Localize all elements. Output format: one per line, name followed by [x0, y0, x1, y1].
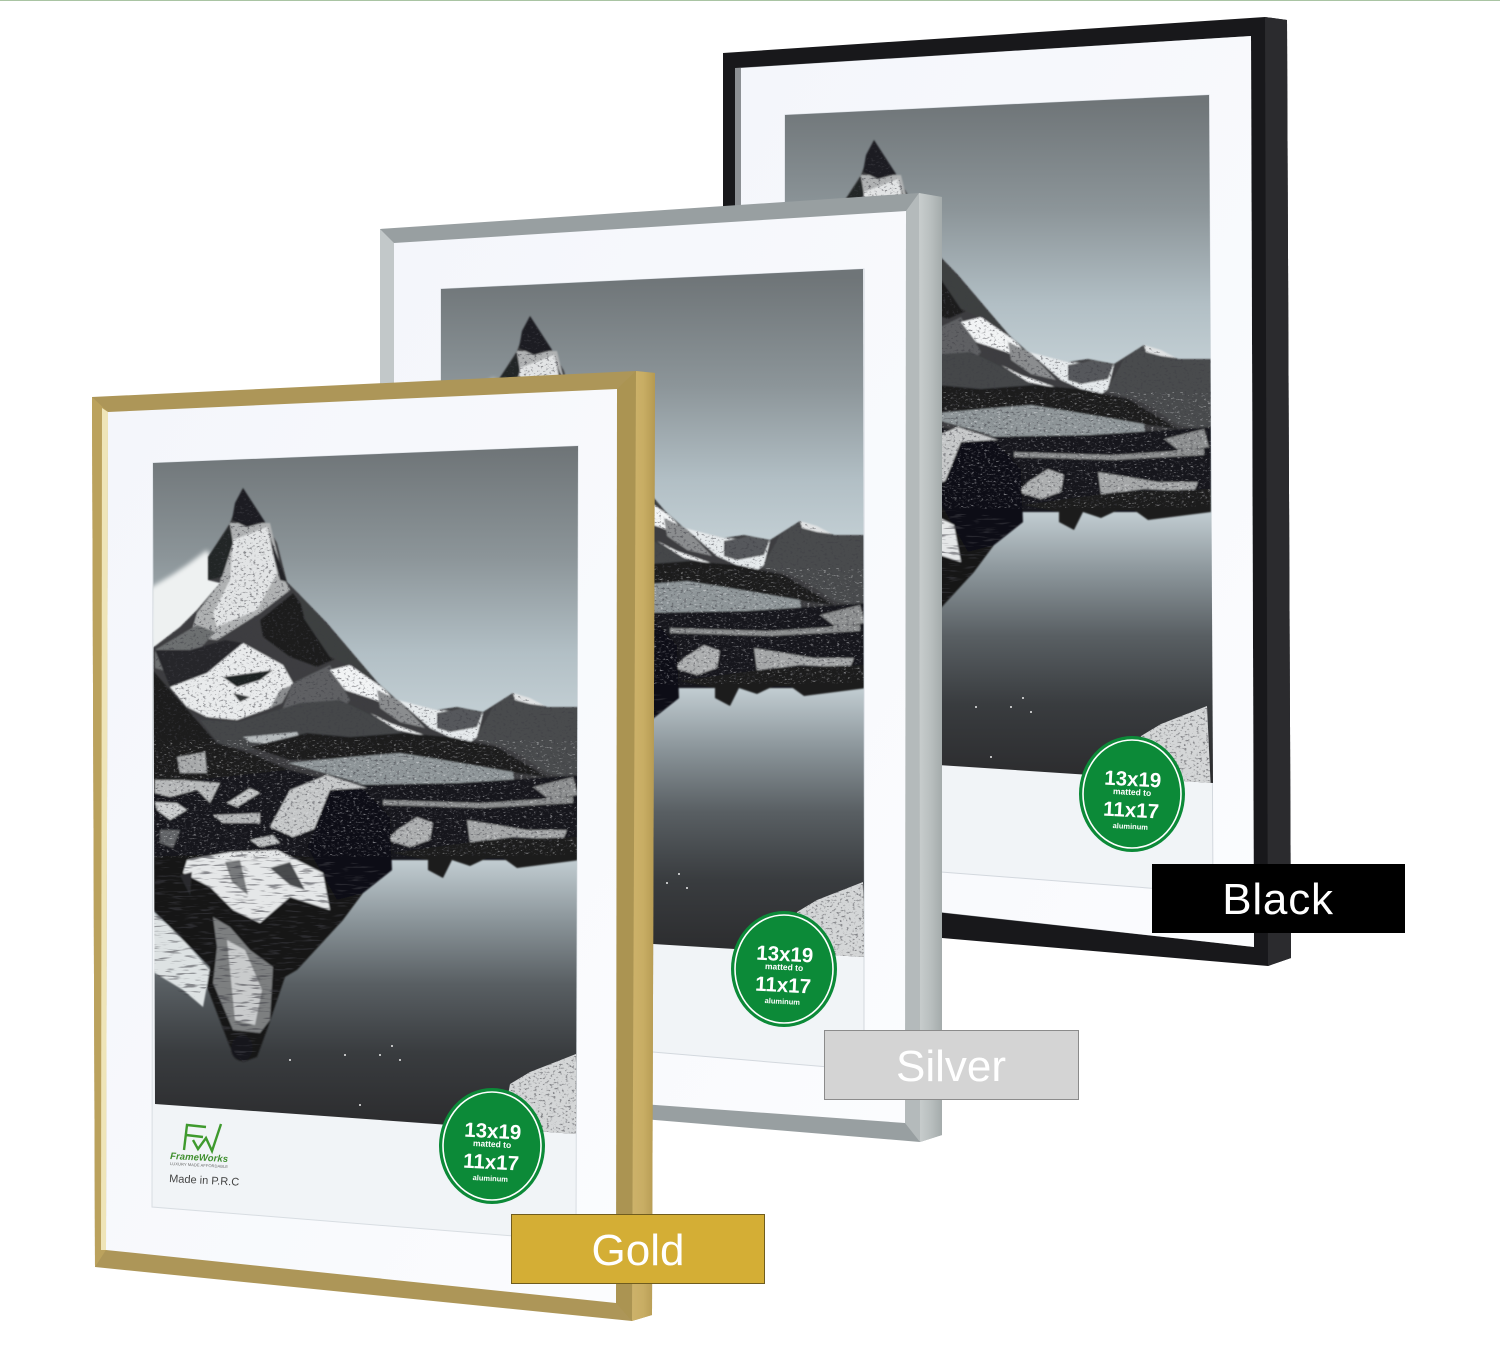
- gold frame: FrameWorks logo: [170, 1124, 228, 1169]
- gold frame: size badge: 13x19: [464, 1119, 522, 1144]
- gold frame: outer body: [92, 371, 655, 1321]
- silver frame: mat window: [441, 269, 864, 1070]
- silver frame: size badge: 11x17: [755, 973, 812, 998]
- gold frame: [92, 371, 655, 1321]
- top green hairline: [0, 0, 1500, 1]
- logo mark: [184, 1124, 221, 1151]
- black frame: size badge: 11x17: [1103, 798, 1160, 823]
- silver frame: side face: [919, 193, 942, 1142]
- silver frame: size badge: aluminum: [764, 996, 801, 1007]
- silver frame: photo: [441, 269, 864, 957]
- black frame: mat window: [785, 95, 1213, 893]
- gold frame: size badge: [439, 1088, 545, 1204]
- label: Silver: Silver: [896, 1042, 1006, 1091]
- label: Gold: [512, 1214, 764, 1284]
- black frame: [723, 17, 1291, 966]
- black frame: photo: [771, 82, 1221, 802]
- silver frame: left strip: [380, 229, 394, 1000]
- black frame: mat board: [741, 36, 1254, 947]
- black frame: side face: [1265, 17, 1291, 966]
- label: Black: Black: [1222, 875, 1334, 924]
- label: Silver: [824, 1030, 1078, 1100]
- black frame: inner shadow: [735, 36, 1254, 947]
- label: Gold: Gold: [592, 1226, 684, 1275]
- gold frame: right front strip: [616, 371, 636, 1321]
- logo tagline: LUXURY MADE AFFORDABLE: [170, 1161, 228, 1169]
- gold frame: side face: [632, 371, 655, 1321]
- black frame: size badge: aluminum: [1112, 821, 1149, 832]
- label: Black: [1152, 864, 1405, 933]
- logo wordmark: FrameWorks: [170, 1151, 228, 1165]
- black frame: outer body: [723, 17, 1291, 966]
- silver frame: [380, 193, 942, 1142]
- black frame: size badge: 13x19: [1104, 767, 1162, 792]
- silver frame: size badge: matted to: [765, 961, 803, 973]
- gold frame: mat board: [106, 389, 617, 1303]
- gold frame: photo: [140, 430, 590, 1150]
- black frame: size badge: matted to: [1113, 786, 1151, 798]
- silver frame: outer body: [380, 193, 942, 1142]
- gold frame: made in text: Made in P.R.C: [169, 1173, 240, 1189]
- silver frame: size badge: 13x19: [756, 942, 814, 967]
- gold frame: mat window: [152, 446, 578, 1241]
- gold frame: size badge: 11x17: [463, 1150, 520, 1175]
- silver frame: mat board: [394, 211, 906, 1123]
- gold frame: left strip: [92, 397, 108, 1267]
- gold frame: size badge: matted to: [473, 1138, 511, 1150]
- black frame: size badge: [1079, 736, 1185, 852]
- silver frame: right front strip: [905, 193, 920, 1142]
- silver frame: size badge: [731, 911, 837, 1027]
- gold frame: inner highlight: [101, 408, 108, 1250]
- gold frame: size badge: aluminum: [472, 1173, 509, 1184]
